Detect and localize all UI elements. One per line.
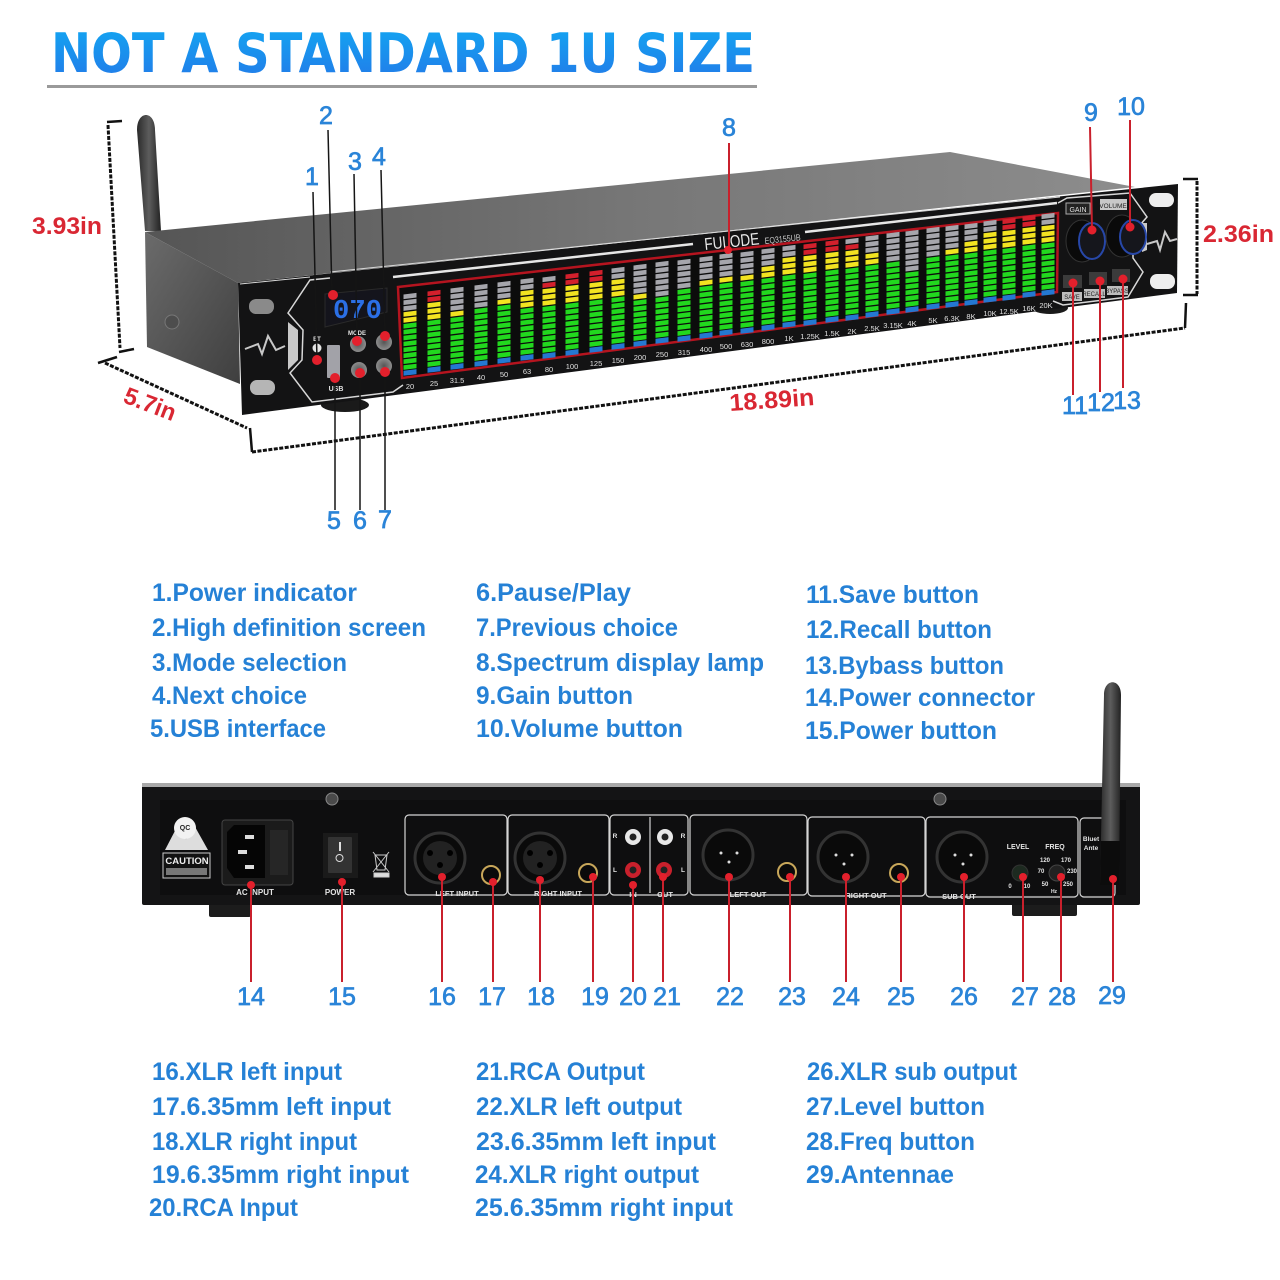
callout numbers: 8 [722,114,736,142]
dimension: 2.36in height: 2.36in [1203,221,1274,248]
dimension: 2.36in height [1183,179,1274,295]
frequency labels: 1.5K [824,329,840,338]
callout numbers: 5 [327,507,341,535]
frequency labels: 125 [590,359,602,368]
front view of equalizer [137,115,1178,415]
safety label [163,817,210,878]
legend column 2 [476,579,764,743]
frequency labels: 10K [983,309,997,318]
frequency labels: 150 [612,356,624,365]
gain and volume knobs: GAIN [1069,207,1087,214]
chassis side [145,232,240,384]
rear callout numbers: 19 [581,983,609,1011]
dimension: 18.89in width [250,303,1186,452]
callout numbers: 6 [353,507,367,535]
frequency labels: 400 [700,345,712,354]
left controls [312,331,392,393]
callout numbers: 10 [1117,93,1145,121]
level and freq knobs: 10 [1024,884,1031,890]
callout numbers [305,93,1145,535]
frequency labels: 16K [1022,304,1036,313]
frequency labels: 250 [656,350,668,359]
icon: antenna [137,115,161,231]
legend column 2: 21.RCA Output [476,1058,646,1086]
legend column 3: 29.Antennae [806,1161,954,1189]
frequency labels: 315 [678,348,690,357]
feet [321,302,1068,412]
rear text labels: LEFT OUT [730,890,767,899]
rear callout numbers: 20 [619,983,647,1011]
panel: connector outlines [405,815,1115,897]
title: NOT A STANDARD 1U SIZE [51,22,755,85]
rear text labels: LEFT INPUT [435,889,479,898]
level and freq knobs: 0 [1008,884,1012,890]
dimension: 3.93in height: 3.93in [32,213,102,240]
rear callout numbers: 28 [1048,983,1076,1011]
rear callout numbers: 27 [1011,983,1039,1011]
rear text labels: R [613,833,618,840]
callout numbers: 12 [1087,389,1115,417]
waveform logos [245,232,1177,354]
XLR connectors [415,830,987,883]
rear callout numbers: 17 [478,983,506,1011]
legend column 2: 6.Pause/Play [476,579,631,607]
rear text labels: R [681,833,686,840]
rear callouts [237,873,1126,1011]
legend column 1: 2.High definition screen [152,614,426,642]
icon: rear antenna [1100,682,1121,885]
rear text labels: SUB OUT [942,892,976,901]
AC input [222,820,293,897]
rear callout numbers: 21 [653,983,681,1011]
legend column 1 [150,579,426,743]
rear text labels: Bluet [1083,836,1100,843]
legend column 2: 22.XLR left output [476,1093,683,1121]
power switch: POWER [325,888,355,897]
callout numbers: 7 [378,506,392,534]
legend column 1: 4.Next choice [152,682,307,710]
level and freq knobs: LEVEL [1007,844,1030,851]
chassis top [145,152,1135,283]
save recall bypass buttons: BYPASS [1105,289,1129,295]
legend column 1: 17.6.35mm left input [152,1093,392,1121]
legend column 2: 24.XLR right output [475,1161,700,1189]
frequency labels: 2.5K [864,324,880,333]
AC input: AC INPUT [236,888,274,897]
level and freq knobs: FREQ [1045,844,1065,851]
legend column 1: 19.6.35mm right input [152,1161,410,1189]
frequency labels: 4K [907,319,917,328]
legend column 1: 3.Mode selection [152,649,347,677]
safety label: CAUTION [165,856,209,867]
frequency labels: 80 [545,365,553,374]
brand label: FULODE [703,229,760,254]
frequency labels: 630 [741,340,753,349]
legend column 1: 5.USB interface [150,715,326,743]
rear text labels: Ante [1084,845,1099,852]
frequency labels: 25 [430,379,438,388]
rear feet [209,903,1077,917]
frequency labels: 20 [406,382,414,391]
save recall bypass buttons [1062,269,1130,301]
level and freq knobs: 120 [1040,858,1051,864]
RCA connectors [625,829,673,878]
legend column 1: 1.Power indicator [152,579,357,607]
gain and volume knobs: VOLUME [1099,203,1127,210]
frequency labels: 3.15K [883,321,903,330]
safety label: QC [180,825,190,832]
rear callout numbers: 15 [328,983,356,1011]
rear callout numbers: 24 [832,983,860,1011]
frequency labels: 1.25K [800,332,820,341]
dimension: 3.93in height [32,121,134,352]
frequency labels: 20K [1039,301,1053,310]
legend column 3: 26.XLR sub output [807,1058,1018,1086]
frequency labels [406,301,1053,391]
icon: recycling bin [373,852,389,877]
callout numbers: 2 [319,102,333,130]
rear text labels: L [681,867,685,874]
legend column 1: 18.XLR right input [152,1128,358,1156]
frequency labels: 1K [784,334,794,343]
legend column 2: 9.Gain button [476,682,633,710]
left controls: MODE [348,331,366,337]
callout numbers: 9 [1084,99,1098,127]
dimension: 5.7in depth [98,357,247,428]
rear callout numbers [237,982,1126,1011]
left controls: USB [329,386,343,393]
frequency labels: 2K [847,327,857,336]
legend column 3: 14.Power connector [805,684,1035,712]
frequency labels: 8K [966,312,976,321]
legend column 1: 20.RCA Input [149,1194,299,1222]
callout lines [312,120,1134,510]
level and freq knobs: 170 [1061,858,1072,864]
spectrum bars [410,212,1048,375]
rear callout numbers: 29 [1098,982,1126,1010]
rear callout numbers: 23 [778,983,806,1011]
save recall bypass buttons: SAVE [1064,295,1080,301]
frequency labels: 200 [634,353,646,362]
rear text labels: RIGHT INPUT [534,889,582,898]
legend column 1 [149,1058,410,1222]
save recall bypass buttons: RECALL [1082,292,1106,298]
rear chassis [142,783,1140,905]
legend column 3: 28.Freq button [806,1128,975,1156]
rear callout lines [247,873,1117,982]
level and freq knobs [1007,844,1078,895]
frequency labels: 31.5 [450,376,464,385]
rear text labels [435,833,1100,901]
dimension: 18.89in width: 18.89in [729,384,815,417]
mounting slots [249,193,1175,395]
brand label: EQ3155UB [764,232,801,246]
dimension: 5.7in depth: 5.7in [120,382,180,427]
legend column 3: 27.Level button [806,1093,985,1121]
legend column 2: 23.6.35mm left input [476,1128,717,1156]
front legend [150,579,1035,745]
rear callout numbers: 16 [428,983,456,1011]
rear callout numbers: 22 [716,983,744,1011]
front callouts [305,93,1145,535]
screen [325,288,387,327]
rear view of equalizer [142,682,1140,917]
frequency labels: 12.5K [999,307,1019,316]
callout numbers: 11 [1062,392,1088,420]
legend column 3 [805,581,1035,745]
frequency labels: 50 [500,370,508,379]
screen: 070 [333,297,382,327]
rear text labels: RIGHT OUT [845,891,887,900]
frequency labels: 63 [523,367,531,376]
level and freq knobs: 50 [1042,882,1049,888]
power switch [323,833,358,897]
rear callout numbers: 18 [527,983,555,1011]
rear text labels: L [613,867,617,874]
callout numbers: 4 [372,143,386,171]
frequency labels: 800 [762,337,774,346]
6.35mm jacks [482,863,908,884]
gain and volume knobs [1066,199,1146,262]
front panel [238,184,1178,415]
left controls: ET [313,337,321,343]
legend column 2: 8.Spectrum display lamp [476,649,764,677]
frequency labels: 40 [477,373,485,382]
rear legend [149,1058,1018,1222]
legend column 3: 13.Bybass button [805,652,1004,680]
rear callout numbers: 14 [237,983,265,1011]
level and freq knobs: 250 [1063,882,1074,888]
panel trim [240,193,1147,402]
frequency labels: 5K [928,316,938,325]
brand label [703,229,801,254]
rear text labels: IN [629,890,637,899]
level and freq knobs: Hz [1051,889,1058,895]
spectrum display [398,212,1058,378]
legend column 2: 10.Volume button [476,715,683,743]
level and freq knobs: 70 [1038,869,1045,875]
rear callout numbers: 26 [950,983,978,1011]
legend column 3 [806,1058,1018,1189]
level and freq knobs: 230 [1067,869,1078,875]
frequency labels: 6.3K [944,314,960,323]
legend column 3: 15.Power button [805,717,997,745]
legend column 1: 16.XLR left input [152,1058,343,1086]
legend column 3: 11.Save button [806,581,979,609]
legend column 2: 7.Previous choice [476,614,678,642]
callout numbers: 1 [305,163,319,191]
callout numbers: 13 [1113,387,1141,415]
rear text labels: OUT [657,890,673,899]
rear callout numbers: 25 [887,983,915,1011]
screws [326,793,946,805]
legend column 3: 12.Recall button [806,616,992,644]
callout numbers: 3 [348,148,362,176]
frequency labels: 100 [566,362,578,371]
legend column 2: 25.6.35mm right input [475,1194,734,1222]
legend column 2 [475,1058,734,1222]
frequency labels: 500 [720,342,732,351]
